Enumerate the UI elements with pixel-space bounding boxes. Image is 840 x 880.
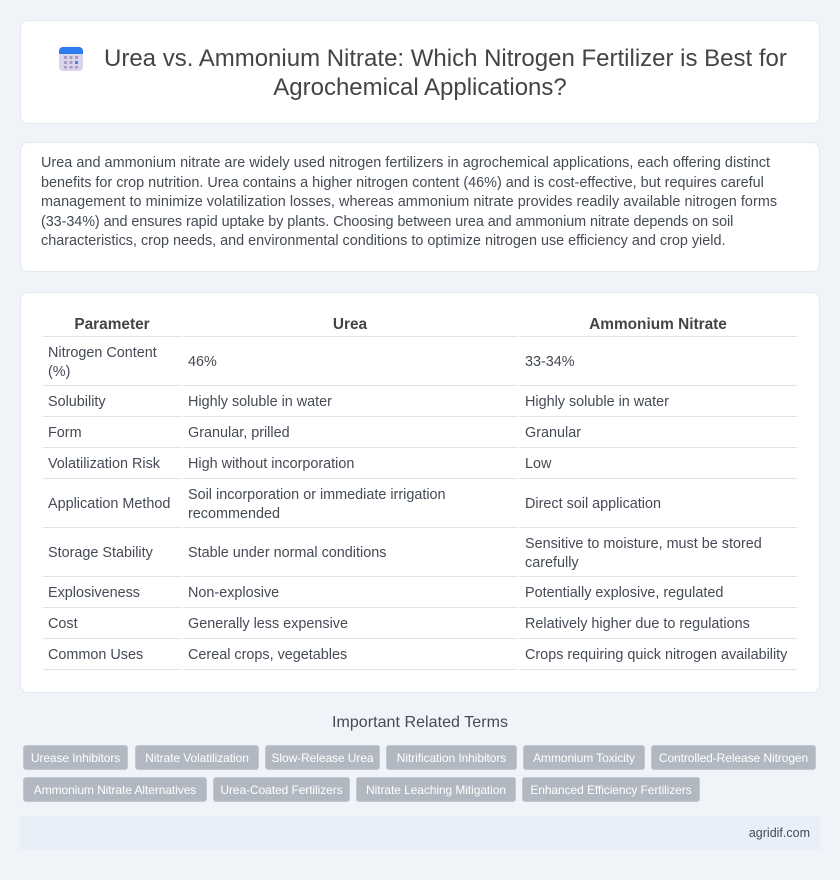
comparison table: Granular <box>525 425 581 441</box>
comparison table: Sensitive to moisture, must be stored <box>525 536 762 552</box>
comparison table: Application Method <box>48 496 170 512</box>
text block: introduction <box>41 155 777 249</box>
comparison table: Storage Stability <box>48 545 153 561</box>
footer source text: agridif.com <box>749 826 810 840</box>
text block: introduction: (33-34%) and ensures rapid uptake by plants. Choosing between urea and ammonium nitrate depends on soil <box>41 214 733 230</box>
tag: Urea-Coated Fertilizers <box>220 783 343 797</box>
related term tags <box>23 745 816 802</box>
title: Urea vs. Ammonium Nitrate: Which Nitrogen Fertilizer is Best for <box>104 45 787 72</box>
footer bar <box>20 816 820 850</box>
comparison table: Urea <box>333 316 367 333</box>
tag: Nitrification Inhibitors <box>397 751 506 765</box>
comparison table: 46% <box>188 354 217 370</box>
tag: Ammonium Nitrate Alternatives <box>34 783 196 797</box>
comparison table: Cereal crops, vegetables <box>188 647 347 663</box>
heading: related terms: Important Related Terms <box>332 714 508 731</box>
comparison table: Common Uses <box>48 647 143 663</box>
comparison table: carefully <box>525 554 579 570</box>
comparison table <box>43 316 797 670</box>
tag <box>23 745 128 770</box>
comparison table: Granular, prilled <box>188 425 290 441</box>
tag <box>651 745 816 770</box>
text block: introduction: benefits for crop nutrition. Urea contains a higher nitrogen content (46%) and is cost-effective, but requires careful <box>41 174 764 190</box>
comparison table: 33-34% <box>525 354 575 370</box>
comparison table: High without incorporation <box>188 456 354 472</box>
comparison table: Direct soil application <box>525 496 661 512</box>
comparison table: Solubility <box>48 394 106 410</box>
tag <box>23 777 207 802</box>
tag: Urease Inhibitors <box>31 751 120 765</box>
comparison table: Generally less expensive <box>188 616 348 632</box>
tag: Ammonium Toxicity <box>533 751 635 765</box>
tag <box>213 777 350 802</box>
tag: Nitrate Volatilization <box>145 751 249 765</box>
tag <box>265 745 380 770</box>
comparison table: Form <box>48 425 82 441</box>
comparison table: Soil incorporation or immediate irrigation <box>188 487 446 503</box>
tag: Nitrate Leaching Mitigation <box>366 783 506 797</box>
tag <box>386 745 517 770</box>
panel: title card <box>20 20 820 124</box>
comparison table: Potentially explosive, regulated <box>525 585 723 601</box>
comparison table: Crops requiring quick nitrogen availability <box>525 647 787 663</box>
comparison table: Highly soluble in water <box>525 394 669 410</box>
comparison table: Explosiveness <box>48 585 140 601</box>
tag <box>356 777 516 802</box>
tag <box>523 745 645 770</box>
tag <box>135 745 259 770</box>
text block: introduction: characteristics, crop needs, and environmental conditions to optimize nitrogen use efficiency and crop yield. <box>41 233 725 249</box>
title <box>104 45 787 101</box>
comparison table: Nitrogen Content <box>48 345 157 361</box>
comparison table: Non-explosive <box>188 585 279 601</box>
title: Agrochemical Applications? <box>273 74 567 101</box>
panel: comparison table <box>20 292 820 693</box>
tag: Slow-Release Urea <box>271 751 374 765</box>
tag: Controlled-Release Nitrogen <box>659 751 808 765</box>
comparison table: Relatively higher due to regulations <box>525 616 750 632</box>
comparison table: recommended <box>188 506 280 522</box>
tag: Enhanced Efficiency Fertilizers <box>530 783 692 797</box>
text block: introduction: Urea and ammonium nitrate are widely used nitrogen fertilizers in agrochemical applications, each offering distinct <box>41 155 770 171</box>
comparison table: Low <box>525 456 551 472</box>
tag <box>522 777 700 802</box>
comparison table: Highly soluble in water <box>188 394 332 410</box>
comparison table: Cost <box>48 616 78 632</box>
comparison table: Parameter <box>74 316 150 333</box>
comparison table: Stable under normal conditions <box>188 545 386 561</box>
comparison table: (%) <box>48 364 70 380</box>
icon: calendar <box>59 47 83 71</box>
text block: introduction: management to minimize volatilization losses, whereas ammonium nitrate provides readily available nitrogen forms <box>41 194 777 210</box>
panel: introduction <box>20 142 820 272</box>
comparison table: Ammonium Nitrate <box>589 316 727 333</box>
comparison table: Volatilization Risk <box>48 456 160 472</box>
